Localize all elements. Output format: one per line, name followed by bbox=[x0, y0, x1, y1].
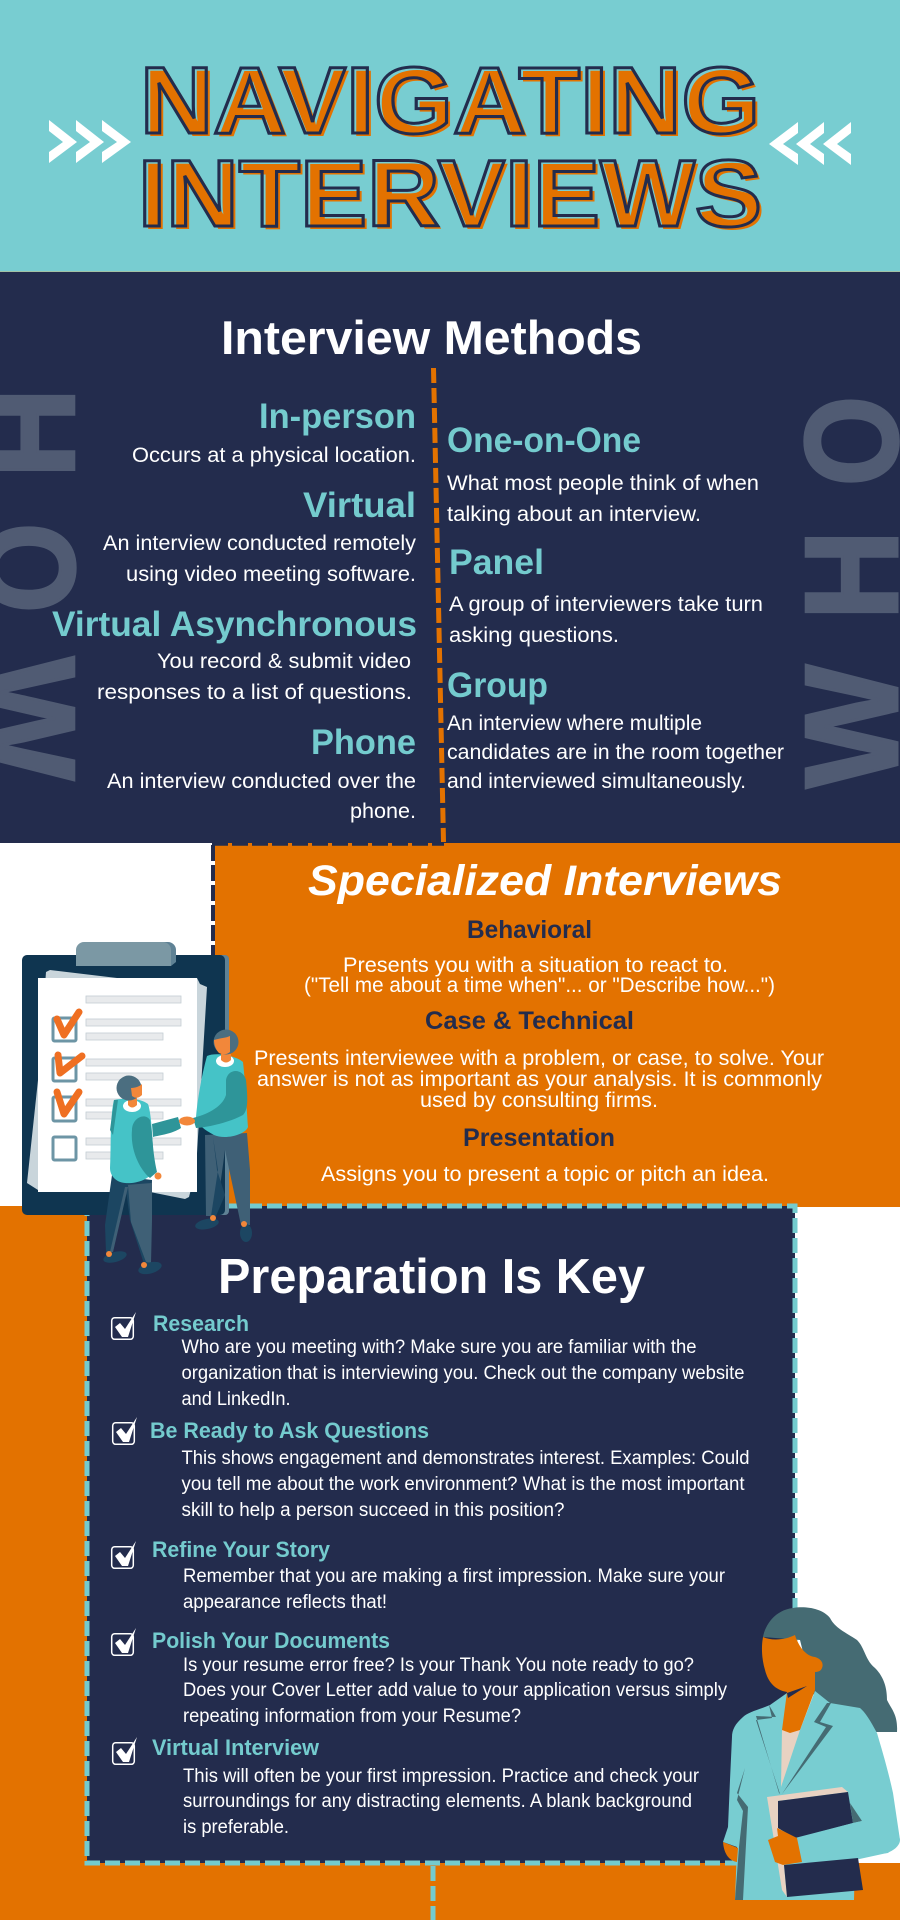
method: virtual: using video meeting software. bbox=[126, 563, 416, 586]
arm over book bbox=[797, 1747, 900, 1862]
header banner bbox=[0, 0, 900, 272]
method: phone bbox=[107, 723, 416, 823]
background: lower orange bbox=[0, 1206, 900, 1920]
item: virtual interview: Virtual Interview bbox=[152, 1735, 320, 1760]
item: research bbox=[112, 1311, 744, 1410]
method: panel: A group of interviewers take turn bbox=[449, 593, 763, 616]
method: phone: An interview conducted over the bbox=[107, 770, 416, 793]
left hand bbox=[723, 1842, 738, 1862]
method: one-on-one: One-on-One bbox=[447, 421, 641, 460]
title: navigating interviews: NAVIGATING bbox=[140, 48, 760, 154]
item: behavioral: ("Tell me about a time when"... or "Describe how...") bbox=[304, 974, 775, 997]
jacket bbox=[723, 1691, 900, 1900]
item: polish your documents bbox=[112, 1628, 727, 1727]
item: case and technical bbox=[254, 1007, 824, 1112]
method: group: Group bbox=[447, 666, 548, 705]
item: case and technical: used by consulting firms. bbox=[420, 1089, 658, 1112]
hair bbox=[763, 1607, 897, 1732]
method: virtual asynchronous: responses to a list of questions. bbox=[97, 681, 412, 704]
method: one-on-one bbox=[447, 421, 759, 526]
watermark: how bbox=[0, 388, 102, 780]
item: be ready to ask questions: skill to help a person succeed in this position? bbox=[182, 1500, 564, 1521]
item: research: Research bbox=[153, 1311, 249, 1336]
item: refine your story: Refine Your Story bbox=[152, 1537, 331, 1562]
method: phone: phone. bbox=[350, 800, 416, 823]
watermark: who bbox=[778, 396, 900, 788]
person: left bbox=[102, 1076, 195, 1276]
face and neck bbox=[762, 1635, 823, 1733]
book bbox=[767, 1787, 863, 1897]
title: navigating interviews bbox=[138, 48, 766, 250]
clipboard bbox=[22, 942, 229, 1215]
illustration: clipboard and handshake bbox=[22, 942, 252, 1276]
item: behavioral: Presents you with a situation to react to. bbox=[343, 954, 728, 977]
method: virtual asynchronous: Virtual Asynchronous bbox=[52, 605, 417, 644]
connector: teal dashed line bbox=[430, 1866, 436, 1920]
icon: left chevrons bbox=[49, 120, 131, 163]
chin shadow bbox=[787, 1686, 807, 1698]
item: behavioral bbox=[304, 916, 775, 997]
checklist lines bbox=[86, 996, 181, 1159]
method: virtual: Virtual bbox=[303, 486, 416, 525]
heading: preparation is key: Preparation Is Key bbox=[218, 1250, 645, 1304]
method: group: candidates are in the room together bbox=[447, 741, 784, 764]
item: polish your documents: Is your resume error free? Is your Thank You note ready to go? bbox=[183, 1655, 694, 1676]
item: case and technical: Case & Technical bbox=[425, 1007, 634, 1035]
method: virtual asynchronous bbox=[52, 605, 417, 704]
item: virtual interview: is preferable. bbox=[183, 1817, 289, 1838]
title: navigating interviews: INTERVIEWS bbox=[138, 141, 762, 247]
method: virtual bbox=[103, 486, 417, 586]
method: virtual asynchronous: You record & submit video bbox=[157, 650, 411, 673]
item: presentation bbox=[321, 1124, 769, 1186]
item: be ready to ask questions: Be Ready to Ask Questions bbox=[150, 1418, 429, 1443]
method: one-on-one: What most people think of when bbox=[447, 472, 759, 495]
item: research: and LinkedIn. bbox=[182, 1389, 290, 1410]
shirt bbox=[781, 1730, 800, 1787]
illustration: woman holding a book bbox=[723, 1607, 900, 1900]
method: virtual: An interview conducted remotely bbox=[103, 532, 417, 555]
heading: interview methods: Interview Methods bbox=[221, 311, 642, 364]
method: in-person: Occurs at a physical location. bbox=[132, 444, 416, 467]
item: presentation: Assigns you to present a topic or pitch an idea. bbox=[321, 1163, 769, 1186]
icon: right chevrons bbox=[769, 122, 851, 165]
panel: preparation is key bbox=[87, 1206, 795, 1863]
item: refine your story bbox=[112, 1537, 726, 1613]
item: be ready to ask questions: This shows engagement and demonstrates interest. Examples: Could bbox=[182, 1448, 750, 1469]
right hand bbox=[768, 1828, 802, 1865]
item: refine your story: Remember that you are making a first impression. Make sure your bbox=[183, 1566, 726, 1587]
item: research: organization that is interviewing you. Check out the company website bbox=[182, 1363, 744, 1384]
method: in-person bbox=[132, 397, 416, 467]
item: presentation: Presentation bbox=[463, 1124, 615, 1152]
method: group: An interview where multiple bbox=[447, 712, 702, 735]
method: panel bbox=[449, 543, 763, 647]
item: virtual interview: surroundings for any distracting elements. A blank background bbox=[183, 1791, 692, 1812]
checkboxes bbox=[53, 1018, 76, 1160]
person: right bbox=[193, 1030, 252, 1242]
item: virtual interview bbox=[113, 1735, 700, 1838]
method: panel: Panel bbox=[449, 543, 544, 582]
title: navigating interviews: NAVIGATING bbox=[144, 51, 764, 157]
method: panel: asking questions. bbox=[449, 624, 619, 647]
icon: checkbox bbox=[112, 1541, 136, 1568]
panel: interview methods bbox=[0, 272, 900, 843]
heading: specialized interviews: Specialized Interviews bbox=[308, 857, 782, 905]
item: behavioral: Behavioral bbox=[467, 916, 592, 944]
method: in-person: In-person bbox=[259, 397, 416, 436]
method: group bbox=[447, 666, 784, 793]
item: refine your story: appearance reflects that! bbox=[183, 1592, 387, 1613]
lapels bbox=[735, 1703, 833, 1900]
title: navigating interviews: INTERVIEWS bbox=[142, 144, 766, 250]
item: research: Who are you meeting with? Make sure you are familiar with the bbox=[182, 1337, 696, 1358]
item: polish your documents: Does your Cover Letter add value to your application versus simply bbox=[183, 1680, 727, 1701]
method: one-on-one: talking about an interview. bbox=[447, 503, 701, 526]
item: polish your documents: repeating information from your Resume? bbox=[183, 1706, 521, 1727]
icon: checkbox bbox=[113, 1737, 137, 1764]
icon: checkbox bbox=[112, 1628, 136, 1655]
icon: checkbox bbox=[113, 1417, 137, 1444]
item: case and technical: Presents interviewee with a problem, or case, to solve. Your bbox=[254, 1047, 824, 1070]
item: be ready to ask questions bbox=[113, 1417, 749, 1521]
orange check marks bbox=[57, 1012, 82, 1114]
divider: orange dashed line bbox=[434, 368, 444, 842]
icon: checkbox bbox=[112, 1312, 136, 1339]
method: group: and interviewed simultaneously. bbox=[447, 770, 746, 793]
item: be ready to ask questions: you tell me about the work environment? What is the most important bbox=[182, 1474, 745, 1495]
item: polish your documents: Polish Your Documents bbox=[152, 1628, 390, 1653]
method: phone: Phone bbox=[311, 723, 416, 762]
item: virtual interview: This will often be your first impression. Practice and check your bbox=[183, 1766, 700, 1787]
item: case and technical: answer is not as important as your analysis. It is commonly bbox=[257, 1068, 823, 1091]
panel: specialized interviews bbox=[212, 843, 900, 1207]
